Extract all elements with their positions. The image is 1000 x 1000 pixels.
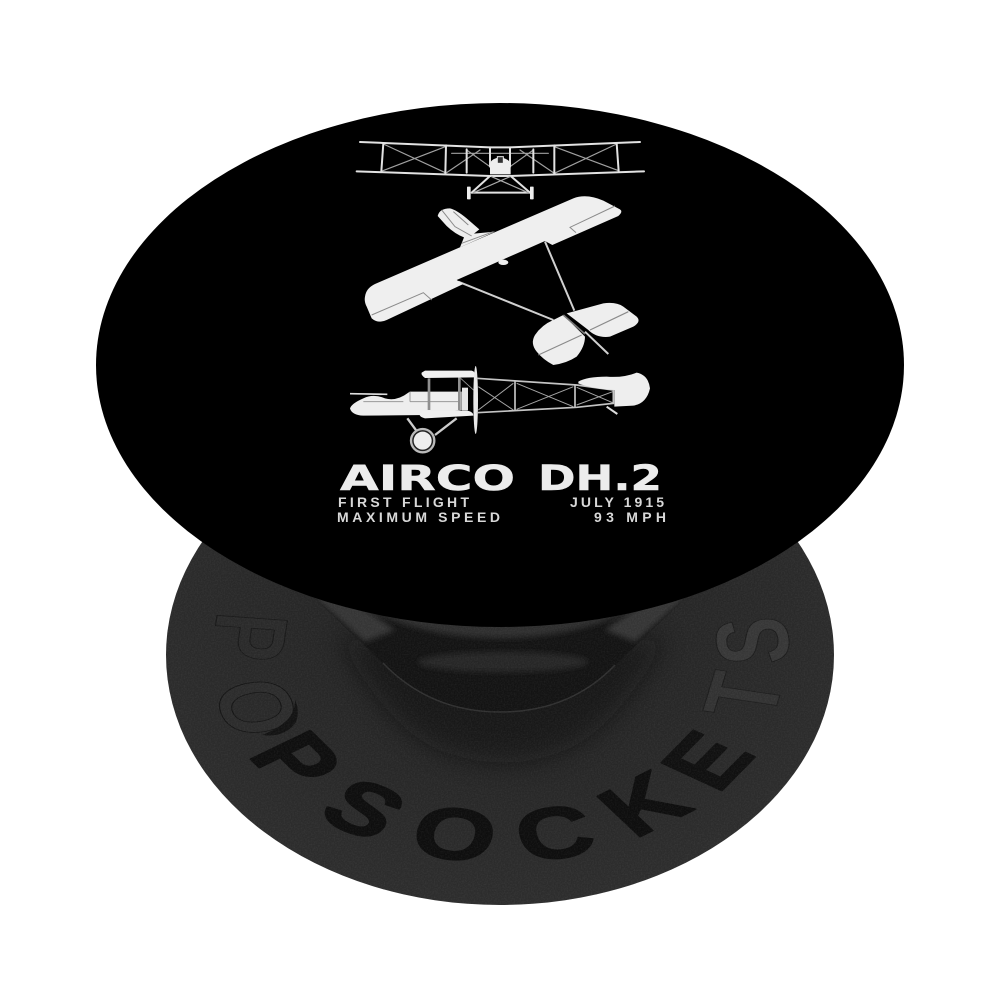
- first flight value: JULY 1915: [570, 494, 664, 510]
- tail: [533, 315, 585, 365]
- letter T debossed: T: [681, 666, 806, 725]
- maximum speed label: MAXIMUM SPEED: [337, 509, 500, 525]
- stem: [321, 600, 679, 672]
- letter O: O: [403, 790, 506, 880]
- brand lettering: [189, 609, 812, 880]
- letter S: S: [302, 762, 425, 856]
- letter O debossed: O: [190, 670, 323, 745]
- aircraft front view: [357, 142, 644, 199]
- engine nacelle: [438, 208, 495, 247]
- black top disc: [96, 103, 904, 627]
- letter C: C: [504, 788, 605, 879]
- stem rim highlight: [383, 663, 615, 712]
- first flight label: FIRST FLIGHT: [338, 494, 469, 510]
- letter P debossed: P: [189, 609, 310, 665]
- undercarriage: [407, 418, 457, 435]
- title: AIRCO: [340, 459, 515, 499]
- letter K: K: [579, 756, 710, 852]
- stem shadow: [340, 640, 665, 762]
- letter S debossed: S: [693, 614, 812, 668]
- popsocket base: [166, 542, 834, 905]
- title: [340, 459, 662, 499]
- leather grain: [168, 544, 834, 904]
- maximum speed value: 93 MPH: [594, 509, 666, 525]
- aircraft top view: [365, 196, 639, 365]
- booms: [458, 242, 608, 354]
- aircraft side view: [350, 366, 650, 452]
- title: DH.2: [538, 459, 662, 499]
- letter E: E: [640, 718, 777, 804]
- wing: [365, 196, 621, 322]
- tail boom truss: [478, 383, 613, 410]
- letter P: P: [227, 718, 364, 804]
